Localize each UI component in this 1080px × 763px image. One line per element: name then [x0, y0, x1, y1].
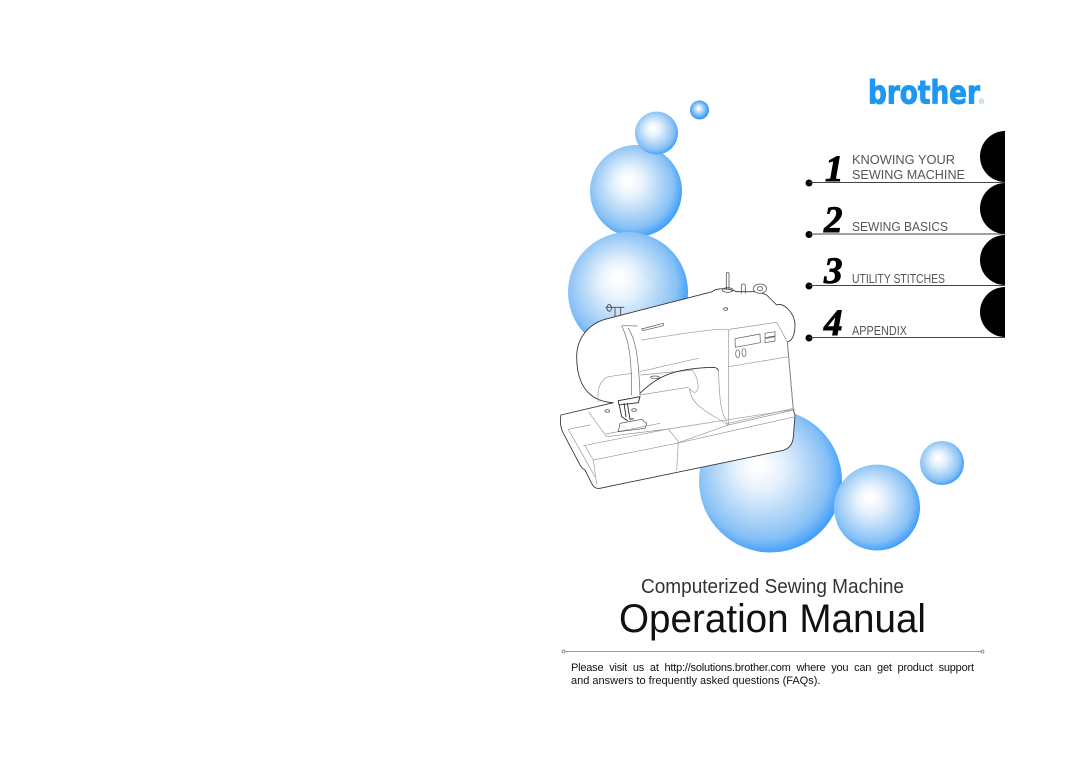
decorative spheres	[568, 100, 964, 552]
bobbin winder stop	[606, 305, 624, 317]
display and buttons	[642, 323, 775, 379]
chapter 4	[806, 303, 1005, 344]
right column panel	[677, 322, 793, 443]
chapter 3: 3	[823, 251, 842, 292]
chapter 1: KNOWING YOUR	[852, 152, 955, 167]
support note	[571, 662, 974, 687]
chapter 2	[806, 200, 1005, 241]
chapter 4: 4	[823, 303, 842, 344]
title: Operation Manual	[619, 597, 926, 641]
chapter 1: 1	[825, 149, 844, 190]
chapter 2: 2	[823, 200, 842, 241]
machine silhouette	[560, 289, 795, 488]
divider	[562, 650, 984, 653]
sewing machine illustration	[560, 272, 795, 488]
needle and presser foot	[605, 397, 647, 432]
chapter 3	[806, 251, 1005, 292]
chapter 1: SEWING MACHINE	[852, 167, 965, 182]
extension table lines	[568, 409, 795, 484]
chapter tabs	[980, 131, 1005, 337]
chapter 1	[806, 149, 1005, 190]
needle bar guides	[622, 326, 640, 395]
brother logo: brother	[868, 74, 980, 112]
support note: Please visit us at http://solutions.brother.com where you can get product support	[571, 662, 974, 674]
brother logo: ®	[979, 98, 985, 106]
spool pin and top controls	[722, 272, 767, 310]
arm panel lines	[598, 329, 728, 402]
chapter 3: UTILITY STITCHES	[852, 271, 945, 286]
subtitle: Computerized Sewing Machine	[641, 576, 904, 598]
chapter 2: SEWING BASICS	[852, 219, 948, 234]
support note: and answers to frequently asked questions (FAQs).	[571, 675, 820, 687]
chapter 4: APPENDIX	[852, 323, 907, 338]
throat of machine	[640, 367, 718, 393]
